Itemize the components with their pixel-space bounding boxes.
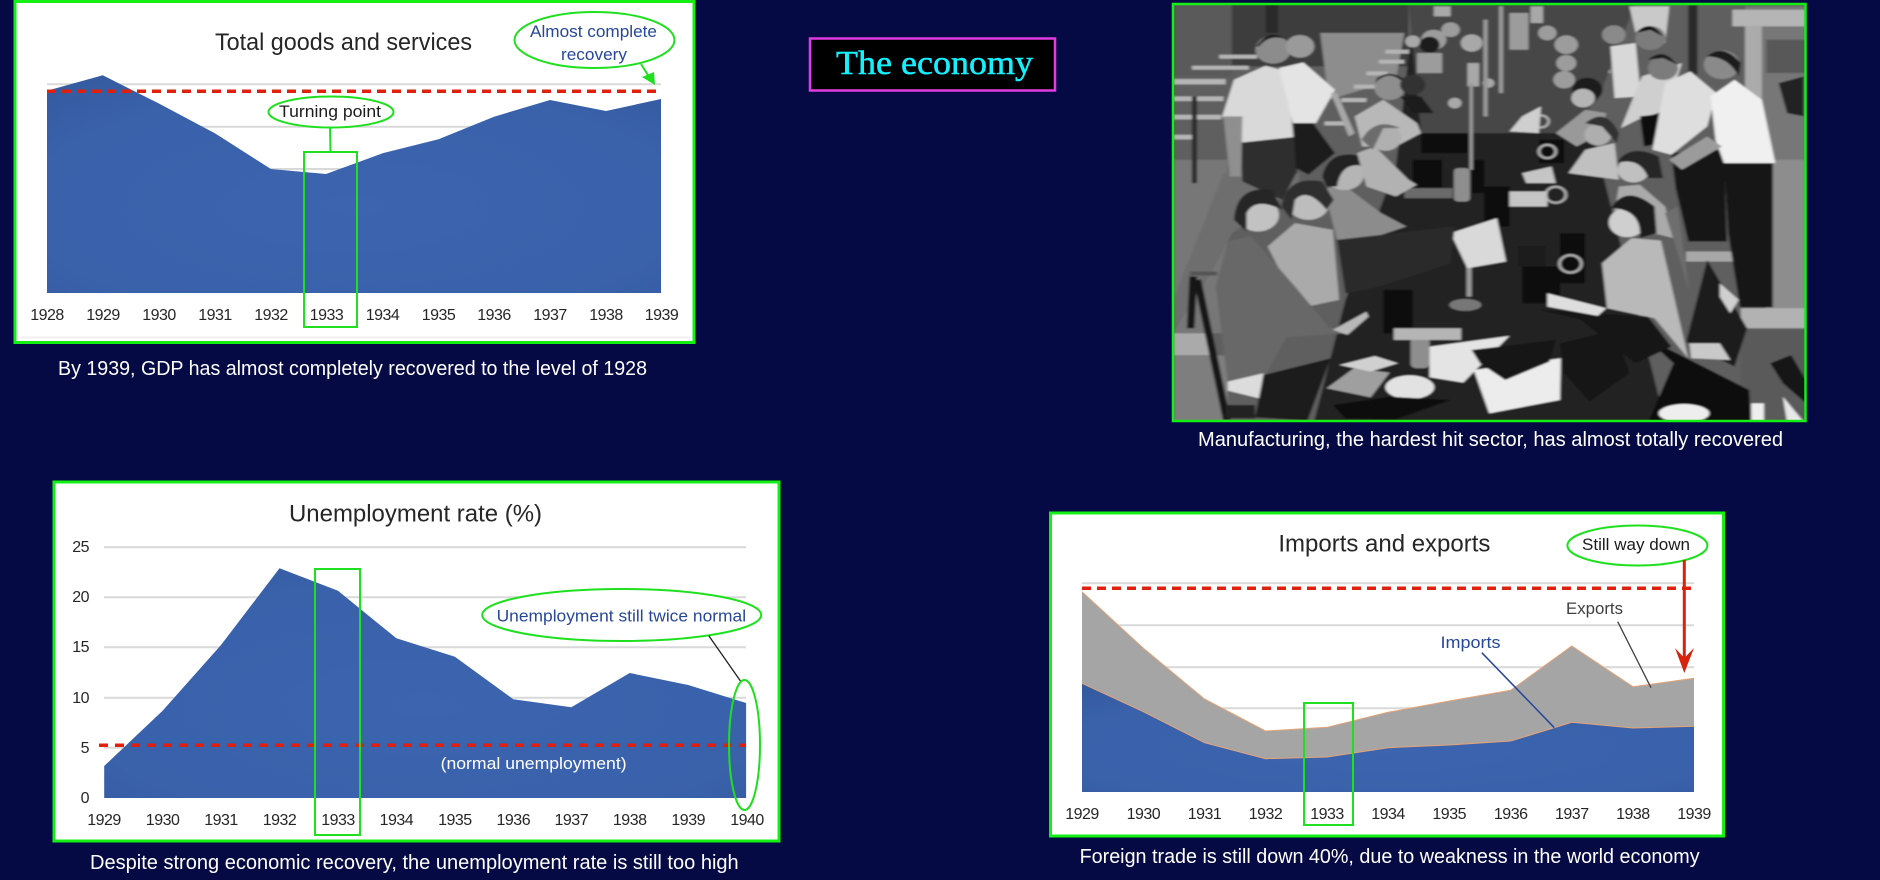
callout: almost complete recovery: recovery bbox=[561, 45, 628, 64]
y axis values bbox=[72, 539, 90, 807]
x axis years: 1932 bbox=[1249, 806, 1283, 823]
x axis years: 1935 bbox=[422, 307, 456, 324]
x axis years: 1933 bbox=[321, 812, 355, 829]
y axis values: 25 bbox=[72, 539, 90, 556]
boxes, paper and tape bbox=[1430, 336, 1509, 383]
x axis years: 1933 bbox=[310, 307, 344, 324]
y axis values: 0 bbox=[81, 790, 90, 807]
callout: almost complete recovery bbox=[514, 12, 674, 68]
x axis years bbox=[1065, 806, 1711, 823]
caption: unemployment: Despite strong economic recovery, the unemployment rate is still too high bbox=[90, 852, 739, 874]
x axis years: 1930 bbox=[142, 307, 176, 324]
x axis years: 1936 bbox=[497, 812, 531, 829]
callout: still way down bbox=[1567, 526, 1707, 566]
x axis years: 1929 bbox=[87, 812, 121, 829]
x axis years: 1935 bbox=[1432, 806, 1467, 823]
callout: unemployment still twice normal bbox=[482, 589, 761, 641]
1929 level dashed line bbox=[1082, 587, 1692, 590]
x axis years: 1937 bbox=[1555, 806, 1589, 823]
x axis years: 1938 bbox=[613, 812, 647, 829]
x axis years: 1937 bbox=[533, 307, 567, 324]
title box bbox=[810, 38, 1055, 90]
area: GDP bbox=[47, 75, 661, 293]
x axis years: 1935 bbox=[438, 812, 472, 829]
normal unemployment dashed line bbox=[99, 744, 746, 747]
photo: garment factory workers at sewing machines bbox=[1173, 3, 1806, 423]
x axis years: 1939 bbox=[671, 812, 706, 829]
highlight: 1933 bbox=[304, 152, 357, 327]
highlight: 1933 bbox=[315, 569, 360, 835]
machines centre bbox=[1383, 133, 1585, 333]
callout: turning point: Turning point bbox=[279, 102, 381, 121]
callout: turning point bbox=[268, 96, 394, 152]
x axis years bbox=[30, 307, 679, 324]
x axis years: 1932 bbox=[254, 307, 288, 324]
benches bbox=[1173, 50, 1610, 139]
x axis years: 1928 bbox=[30, 307, 64, 324]
x axis years: 1929 bbox=[1065, 806, 1099, 823]
x axis years: 1933 bbox=[1310, 806, 1344, 823]
jacket bbox=[1686, 260, 1747, 367]
y axis values: 10 bbox=[72, 690, 90, 707]
x axis years: 1929 bbox=[86, 307, 120, 324]
x axis years: 1939 bbox=[645, 307, 679, 324]
panel: total goods and services chart bbox=[15, 2, 694, 342]
chart title: Unemployment rate (%) bbox=[289, 501, 542, 528]
leader line: callout to 1940 bbox=[709, 636, 741, 682]
panel: unemployment rate chart bbox=[54, 482, 779, 841]
central table bbox=[1314, 20, 1665, 422]
x axis years: 1934 bbox=[380, 812, 414, 829]
panel: imports and exports chart bbox=[1050, 513, 1724, 836]
seated women left bbox=[1324, 183, 1406, 240]
label: imports: Imports bbox=[1440, 633, 1500, 652]
area: exports bbox=[1082, 592, 1694, 792]
chart title: Total goods and services bbox=[215, 29, 472, 56]
standing man left 1 bbox=[1240, 136, 1297, 200]
x axis years: 1936 bbox=[477, 307, 511, 324]
caption: foreign trade: Foreign trade is still down 40%, due to weakness in the world economy bbox=[1080, 846, 1700, 868]
highlight: 1940 bbox=[729, 680, 760, 810]
x axis years: 1931 bbox=[204, 812, 238, 829]
highlight: 1933 bbox=[1304, 703, 1353, 825]
callout: still way down: Still way down bbox=[1582, 535, 1690, 554]
callout: almost complete recovery: Almost complete bbox=[530, 22, 657, 41]
arrow: drop to 1939 bbox=[1675, 560, 1694, 673]
seated women right bbox=[1613, 185, 1674, 238]
x axis years: 1934 bbox=[1371, 806, 1405, 823]
x axis years: 1930 bbox=[1127, 806, 1161, 823]
standing man left 2 bbox=[1293, 122, 1335, 175]
chart title: Imports and exports bbox=[1278, 531, 1490, 558]
caption: GDP: By 1939, GDP has almost completely recovered to the level of 1928 bbox=[58, 358, 647, 380]
caption: manufacturing: Manufacturing, the hardest hit sector, has almost totally recovered bbox=[1198, 429, 1783, 451]
man at back left of table bbox=[1355, 100, 1421, 146]
standing men right bbox=[1610, 43, 1641, 98]
x axis years: 1939 bbox=[1677, 806, 1711, 823]
x axis years: 1938 bbox=[589, 307, 623, 324]
label: normal unemployment: (normal unemployment) bbox=[441, 754, 627, 773]
x axis years bbox=[87, 812, 764, 829]
leader line: exports bbox=[1618, 622, 1651, 688]
y axis values: 15 bbox=[72, 639, 90, 656]
bundles on table bbox=[1644, 337, 1751, 422]
1928 level dashed line bbox=[47, 90, 661, 93]
label: exports: Exports bbox=[1566, 599, 1623, 618]
title box: The economy bbox=[836, 45, 1033, 82]
x axis years: 1937 bbox=[555, 812, 589, 829]
x axis years: 1931 bbox=[1188, 806, 1222, 823]
callout: unemployment still twice normal: Unemployment still twice normal bbox=[497, 607, 746, 626]
x axis years: 1934 bbox=[366, 307, 400, 324]
y axis values: 20 bbox=[72, 589, 90, 606]
far workers bbox=[1417, 13, 1578, 88]
arrow: recovery to 1928 level bbox=[641, 64, 655, 85]
y axis values: 5 bbox=[81, 740, 90, 757]
leader line: imports bbox=[1482, 653, 1554, 728]
x axis years: 1936 bbox=[1494, 806, 1528, 823]
x axis years: 1932 bbox=[263, 812, 297, 829]
x axis years: 1940 bbox=[730, 812, 764, 829]
area: unemployment bbox=[104, 568, 746, 798]
x axis years: 1938 bbox=[1616, 806, 1650, 823]
area: imports bbox=[1082, 683, 1694, 792]
x axis years: 1931 bbox=[198, 307, 232, 324]
x axis years: 1930 bbox=[146, 812, 180, 829]
